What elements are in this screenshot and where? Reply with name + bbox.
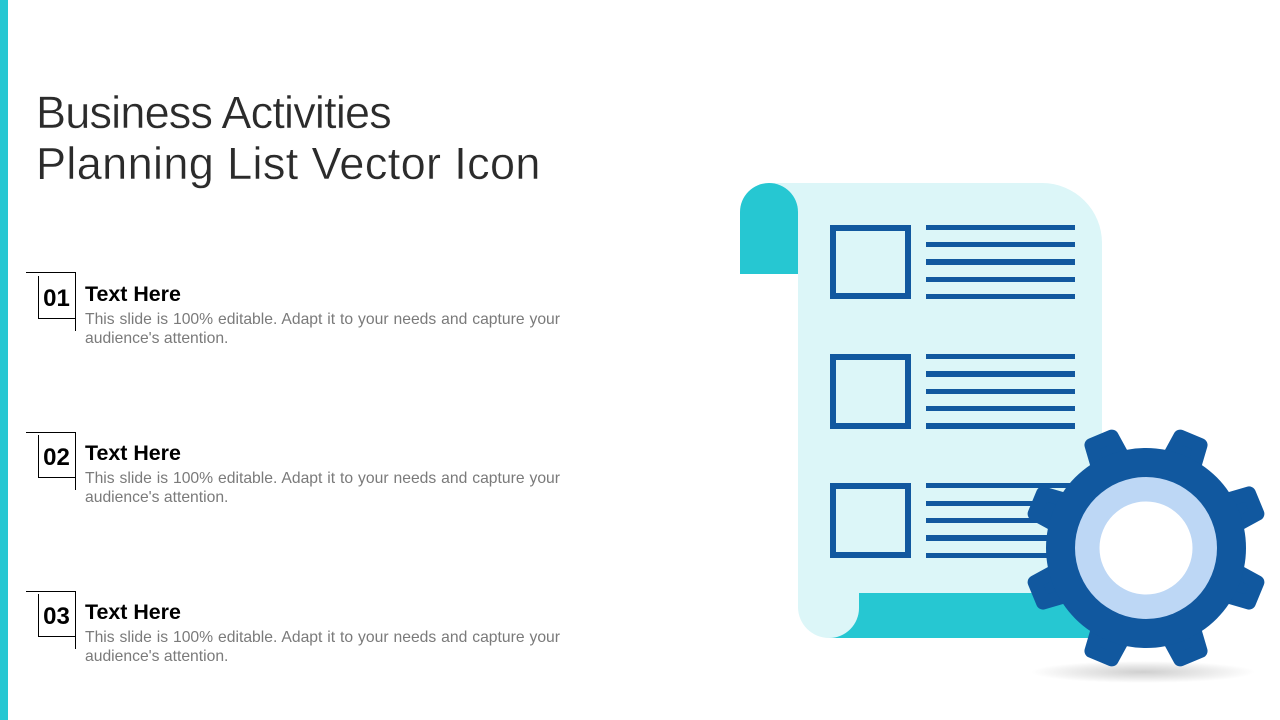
gear centre hole (1100, 502, 1192, 594)
paper sheet (769, 183, 1102, 638)
checklist row 3 (830, 483, 1075, 558)
icon: paper scroll (740, 183, 1102, 638)
heading 01: Text Here (85, 282, 181, 306)
scroll bottom fold (829, 593, 1100, 638)
icon: gear (1033, 435, 1259, 661)
heading 03: Text Here (85, 600, 181, 624)
description 01: This slide is 100% editable. Adapt it to your needs and capture your audience's attention. (85, 311, 560, 347)
list item 02 (26, 432, 560, 506)
list item 03 (26, 591, 560, 665)
number 02: 02 (43, 444, 70, 471)
checklist row 2 (830, 354, 1075, 429)
description 02: This slide is 100% editable. Adapt it to your needs and capture your audience's attention. (85, 470, 560, 506)
list item 01 (26, 272, 560, 347)
title (36, 87, 541, 189)
checklist row 1 (830, 225, 1075, 299)
gear shadow (1031, 661, 1255, 683)
scroll top fold (740, 183, 798, 274)
gear teeth (1033, 435, 1259, 661)
title: Business Activities (36, 87, 391, 138)
gear body (1046, 448, 1246, 648)
description 03: This slide is 100% editable. Adapt it to your needs and capture your audience's attention. (85, 629, 560, 665)
number 01: 01 (43, 285, 70, 312)
heading 02: Text Here (85, 441, 181, 465)
title: Planning List Vector Icon (36, 138, 541, 189)
accent bar (0, 0, 8, 720)
gear light ring (1075, 477, 1217, 619)
number 03: 03 (43, 603, 70, 630)
